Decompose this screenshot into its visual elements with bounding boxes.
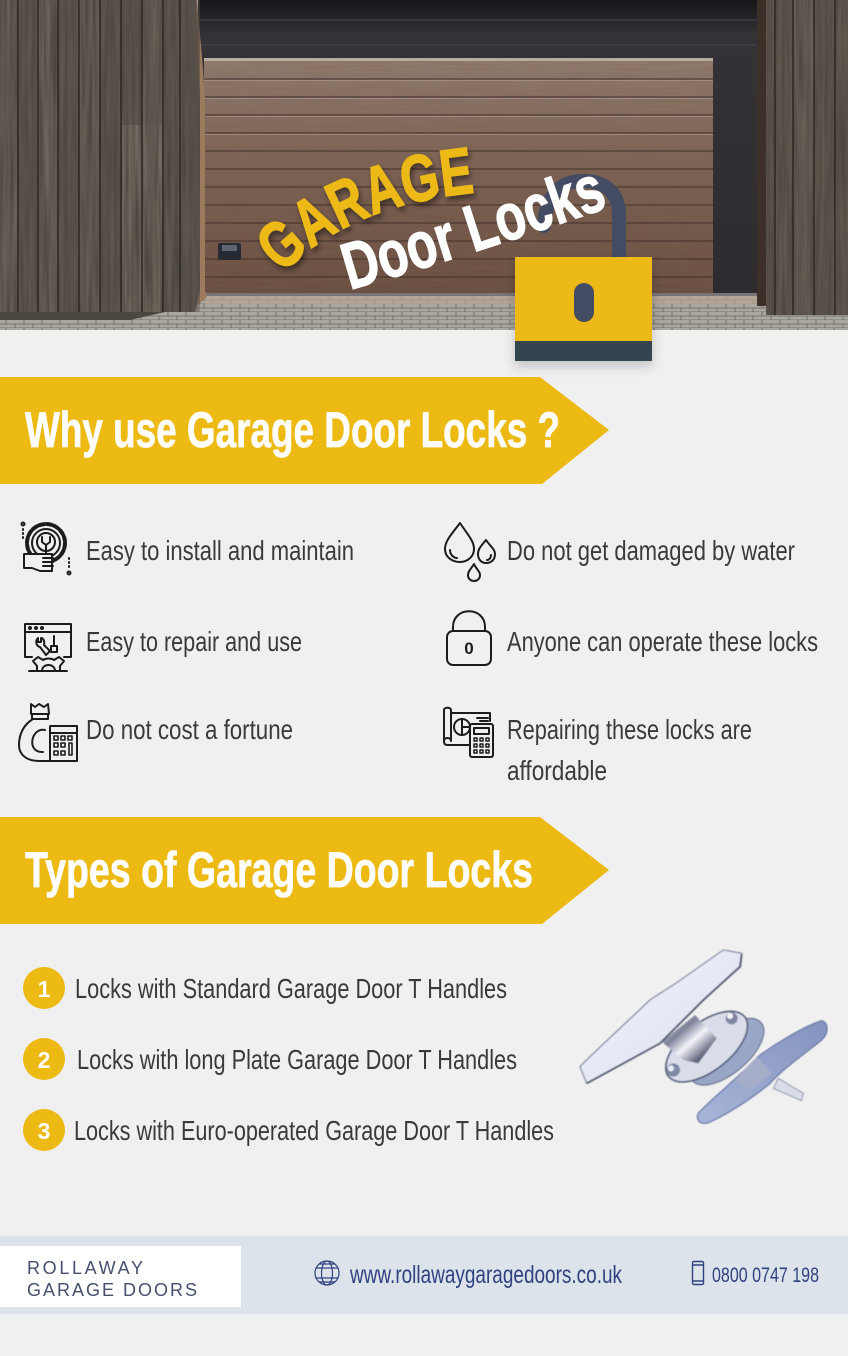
logo: GARAGE DOORS <box>27 1280 197 1300</box>
banner: why use <box>0 377 609 484</box>
mounting plate <box>654 998 775 1097</box>
benefit: anyone can operate <box>447 611 818 665</box>
number badge: 1 <box>38 976 51 1002</box>
door latch <box>218 243 241 260</box>
benefit: easy to repair <box>25 624 302 671</box>
icon: gear with wrench and hand <box>22 522 70 574</box>
list item 1 <box>23 967 507 1009</box>
banner: types: Types of Garage Door Locks <box>25 842 533 898</box>
shackle <box>544 181 619 258</box>
website: www.rollawaygaragedoors.co.uk <box>349 1261 622 1289</box>
logo <box>0 1246 241 1307</box>
website <box>315 1261 622 1289</box>
number badge <box>23 1109 65 1151</box>
benefit: repairing affordable: Repairing these locks are <box>507 714 752 745</box>
padlock graphic <box>515 181 652 361</box>
right wooden wall <box>757 0 848 315</box>
benefit: easy to install <box>22 522 354 574</box>
list item 3 <box>23 1109 554 1151</box>
number badge <box>23 967 65 1009</box>
title: Door Locks <box>340 176 605 290</box>
phone <box>692 1262 819 1287</box>
list item 1: Locks with Standard Garage Door T Handles <box>75 973 507 1004</box>
T-handle lock photo <box>580 950 827 1123</box>
list item 3: Locks with Euro-operated Garage Door T Handles <box>74 1115 554 1146</box>
title: GARAGE: GARAGE <box>259 146 478 272</box>
phone: 0800 0747 198 <box>712 1264 819 1287</box>
icon: plan and calculator <box>444 708 493 757</box>
number badge <box>23 1038 65 1080</box>
brown door panel <box>204 58 757 296</box>
list item 2: Locks with long Plate Garage Door T Handles <box>77 1044 517 1075</box>
list item 2 <box>23 1038 517 1080</box>
icon: phone <box>692 1262 704 1284</box>
number badge: 3 <box>38 1118 50 1144</box>
number badge: 2 <box>38 1047 50 1073</box>
icon: padlock <box>447 611 491 665</box>
benefit: repairing affordable <box>444 708 752 786</box>
icon: water drops <box>445 523 495 581</box>
footer band <box>0 1236 848 1314</box>
hero photo: garage door and wooden walls <box>0 0 848 330</box>
benefit: easy to install: Easy to install and maintain <box>86 535 354 566</box>
benefit: easy to repair: Easy to repair and use <box>86 626 302 657</box>
shaft <box>662 1015 717 1063</box>
icon: money bag with calculator <box>19 704 77 761</box>
rear handle <box>697 1021 827 1123</box>
benefit: do not cost a fortune <box>19 704 293 761</box>
banner: why use: Why use Garage Door Locks ? <box>25 402 560 458</box>
benefit: water <box>445 523 795 581</box>
benefit: do not cost a fortune: Do not cost a fortune <box>86 714 293 745</box>
banner: types <box>0 817 609 924</box>
logo: ROLLAWAY <box>27 1258 143 1278</box>
icon: padlock: 0 <box>464 639 474 658</box>
left wooden wall <box>0 0 207 320</box>
title: Door Locks: Door Locks <box>340 176 605 290</box>
benefit: repairing affordable: affordable <box>507 755 607 786</box>
keyhole <box>574 283 594 322</box>
dark door opening <box>198 0 760 296</box>
lock body <box>515 257 652 361</box>
icon: globe <box>315 1261 339 1285</box>
pavement <box>0 295 848 330</box>
front handle <box>580 950 742 1083</box>
icon: browser with tools <box>25 624 71 671</box>
